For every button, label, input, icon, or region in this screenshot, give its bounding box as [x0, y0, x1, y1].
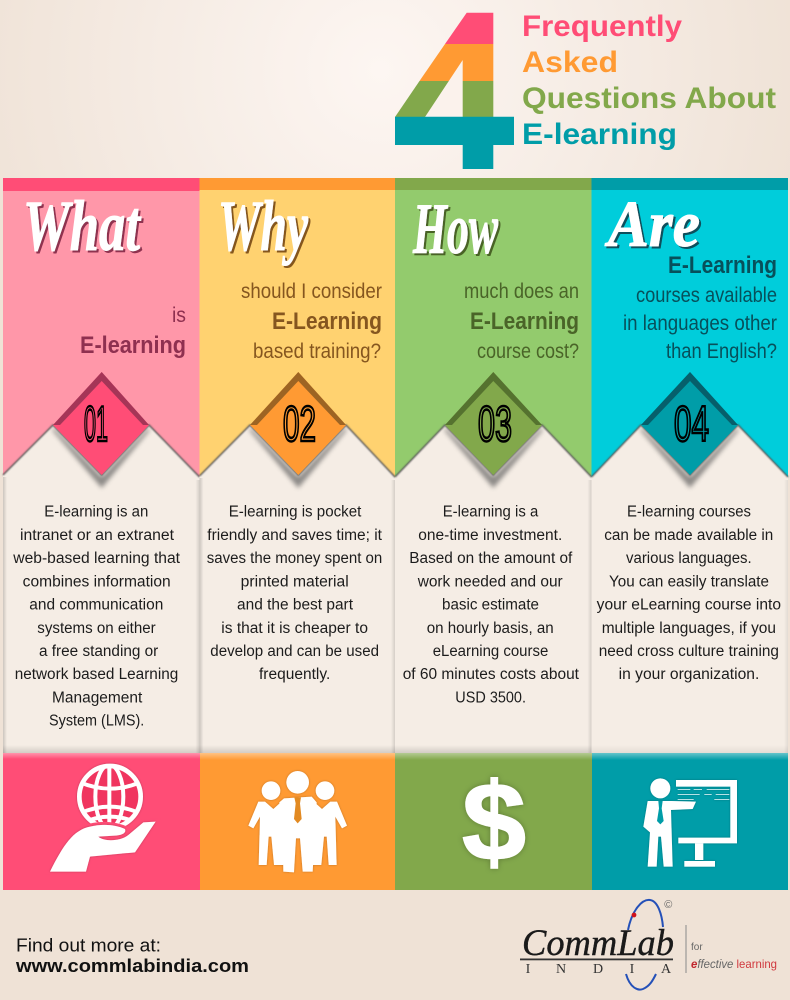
title: Frequently	[522, 10, 682, 43]
answer text 1: System (LMS).	[49, 713, 144, 730]
answer text 1: intranet or an extranet	[20, 527, 175, 544]
icon block: globe in hand	[3, 753, 200, 890]
number 02: 02	[283, 396, 316, 452]
question: what is e-learning: E-learning	[80, 332, 186, 359]
logo: CommLab India: for	[691, 942, 703, 953]
answer text 2: friendly and saves time; it	[207, 527, 383, 544]
answer text 1: network based Learning	[15, 666, 178, 683]
answer text 4: various languages.	[626, 550, 752, 567]
logo: CommLab India: N	[556, 962, 566, 977]
answer text 1: E-learning is an	[44, 504, 148, 521]
question: why e-learning: E-Learning	[272, 308, 382, 335]
answer text 3: USD 3500.	[455, 689, 526, 706]
panel: what: 01	[84, 396, 108, 452]
answer text 2: is that it is cheaper to	[221, 620, 368, 637]
logo: CommLab India: A	[661, 962, 672, 977]
question: why e-learning	[241, 280, 382, 363]
answer text 4: your eLearning course into	[597, 596, 781, 614]
question: how much: E-Learning	[470, 308, 579, 335]
panel: are	[592, 178, 788, 753]
question: how much: much does an	[464, 280, 579, 303]
panel: what	[3, 178, 200, 753]
answer text 3: basic estimate	[442, 596, 539, 614]
answer text 4: need cross culture training	[599, 643, 779, 660]
footer: find out more	[15, 935, 249, 976]
logo: CommLab India: I	[526, 962, 531, 977]
answer text 4: multiple languages, if you	[602, 620, 776, 637]
answer text 4: You can easily translate	[609, 573, 769, 590]
question: how much: course cost?	[477, 340, 579, 363]
question: why e-learning: based training?	[253, 340, 381, 363]
icon block: presenter	[592, 753, 788, 890]
answer text 4: can be made available in	[604, 527, 773, 544]
title: Questions About	[522, 82, 776, 115]
answer text 3: one-time investment.	[418, 527, 562, 544]
answer text 1	[12, 504, 181, 730]
answer text 3: Based on the amount of	[409, 550, 573, 567]
answer text 2: frequently.	[259, 666, 330, 683]
logo: CommLab India	[520, 899, 777, 990]
logo: CommLab India: D	[593, 962, 603, 977]
answer text 2: E-learning is pocket	[229, 504, 362, 521]
question: why e-learning: should I consider	[241, 280, 382, 303]
logo: CommLab India: CommLab	[522, 923, 674, 964]
answer text 4: in your organization.	[619, 666, 759, 683]
answer text 3: E-learning is a	[443, 504, 539, 521]
answer text 3: work needed and our	[417, 573, 563, 590]
logo: CommLab India: effective learning	[691, 957, 777, 971]
answer text 2: and the best part	[237, 596, 354, 614]
footer: find out more: www.commlabindia.com	[15, 955, 249, 976]
answer text 2: develop and can be used	[210, 643, 379, 660]
panel: how	[395, 178, 592, 753]
title: E-learning	[522, 118, 677, 151]
answer text 3: on hourly basis, an	[427, 620, 554, 637]
answer text 1: combines information	[23, 573, 171, 590]
heading: What: What	[23, 186, 141, 266]
question: what is e-learning: is	[172, 304, 186, 327]
big number 4	[395, 13, 514, 169]
logo: CommLab India: ©	[664, 899, 672, 911]
answer text 3: of 60 minutes costs about	[403, 666, 580, 683]
icon block: team	[200, 753, 395, 890]
heading: How: How	[412, 189, 499, 269]
question: are courses available: than English?	[666, 340, 777, 363]
icon block: dollar: $	[462, 761, 526, 884]
number 03: 03	[478, 396, 512, 452]
answer text 2: printed material	[241, 573, 349, 590]
answer text 3: eLearning course	[433, 643, 548, 660]
question: are courses available: E-Learning	[668, 252, 777, 279]
answer text 4	[597, 504, 781, 683]
question: are courses available	[623, 252, 777, 363]
heading: Are: Are	[604, 188, 700, 261]
icon block: dollar	[395, 753, 592, 890]
answer text 1: systems on either	[37, 620, 156, 637]
number 04: 04	[674, 396, 709, 452]
answer text 2: saves the money spent on	[207, 550, 382, 567]
question: what is e-learning	[80, 304, 186, 359]
panel: why	[200, 178, 395, 753]
answer text 1: and communication	[29, 596, 163, 614]
title	[522, 10, 776, 151]
answer text 1: Management	[52, 689, 143, 706]
answer text 2	[207, 504, 383, 683]
answer text 4: E-learning courses	[627, 504, 751, 521]
heading: Why: Why	[218, 186, 309, 266]
answer text 1: web-based learning that	[12, 550, 181, 567]
logo: CommLab India: I	[630, 962, 635, 977]
answer text 1: a free standing or	[39, 643, 158, 660]
footer: find out more: Find out more at:	[16, 935, 161, 956]
answer text 3	[403, 504, 580, 706]
title: Asked	[522, 46, 618, 79]
question: how much	[464, 280, 579, 363]
